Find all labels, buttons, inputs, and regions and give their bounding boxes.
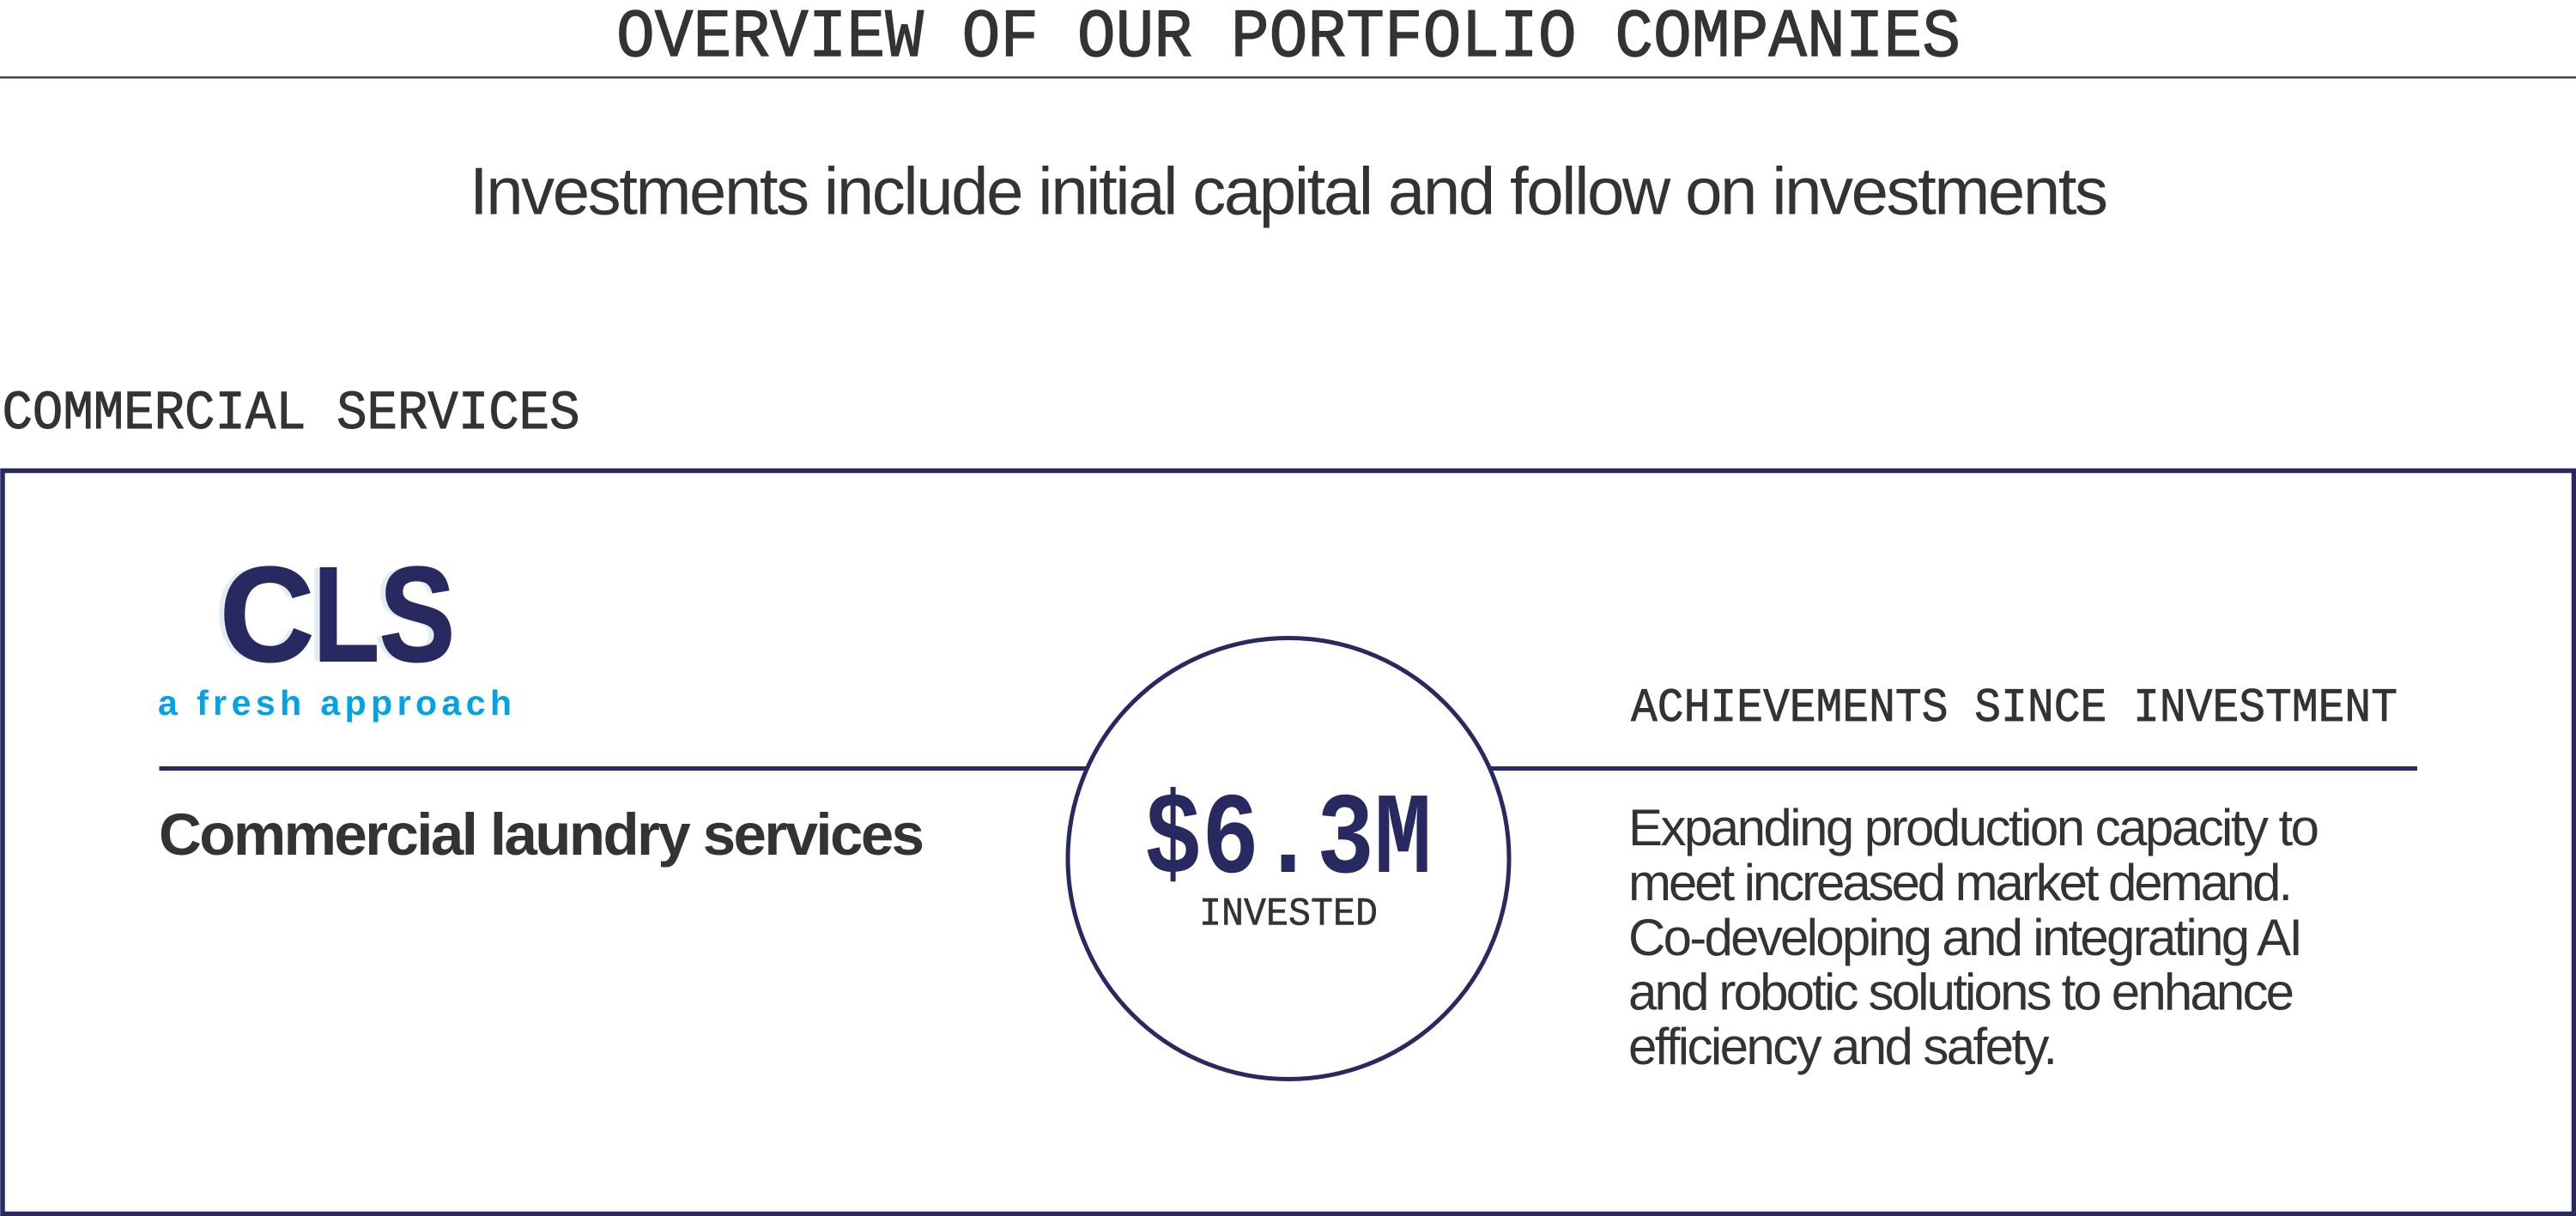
panel: CLS company card (3, 470, 2573, 1213)
logo: CLS a fresh approach: C (220, 540, 314, 690)
logo: CLS a fresh approach: S (373, 540, 449, 690)
invested label: INVESTED (1199, 892, 1378, 937)
achievements text: Expanding production capacity to (1628, 799, 2319, 856)
panel frame (3, 470, 2573, 1213)
logo: CLS a fresh approach: S (379, 540, 455, 690)
achievements heading: ACHIEVEMENTS SINCE INVESTMENT (1631, 681, 2397, 735)
logo: CLS a fresh approach: L (307, 540, 373, 690)
subtitle: Investments include initial capital and follow on investments (470, 153, 2108, 228)
achievements text: and robotic solutions to enhance (1628, 963, 2294, 1021)
logo: CLS a fresh approach: C (214, 540, 308, 690)
company description: Commercial laundry services (159, 802, 924, 868)
section heading: commercial services: COMMERCIAL SERVICES (2, 384, 580, 445)
achievements text: efficiency and safety. (1628, 1018, 2058, 1075)
logo: CLS a fresh approach: a fresh approach (158, 683, 512, 723)
investment circle (1068, 638, 1509, 1080)
invested amount: $6.3M (1144, 776, 1432, 907)
achievements text (1628, 799, 2319, 1075)
achievements text: meet increased market demand. (1628, 854, 2293, 911)
title: OVERVIEW OF OUR PORTFOLIO COMPANIES (616, 0, 1961, 77)
achievements text: Co-developing and integrating AI (1628, 909, 2303, 966)
logo: CLS a fresh approach: L (313, 540, 379, 690)
logo: CLS a fresh approach (158, 540, 512, 723)
